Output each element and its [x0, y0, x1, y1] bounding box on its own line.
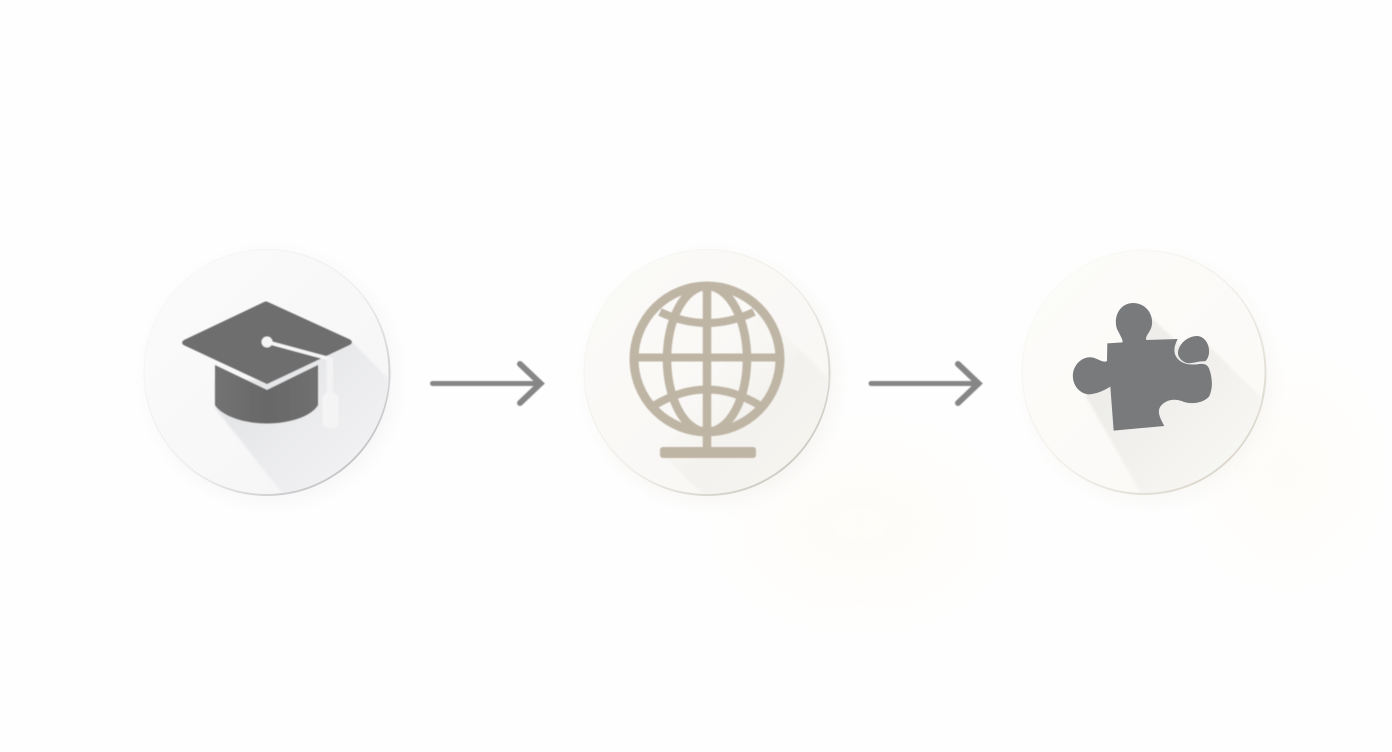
long shadow 3 [1086, 320, 1262, 492]
long shadow 1 [214, 343, 389, 492]
tassel string [326, 358, 333, 394]
puzzle body [1073, 303, 1212, 431]
icon: globe [634, 286, 780, 458]
cap button [262, 336, 272, 348]
puzzle tab [1178, 336, 1209, 363]
meridians [667, 286, 747, 448]
arrow 1 [432, 364, 540, 403]
tassel cord [267, 342, 330, 359]
infographic canvas [144, 249, 1266, 497]
step 2: globe badge [584, 249, 830, 496]
parallels [634, 312, 780, 405]
step 1: graduation cap badge [144, 249, 390, 496]
globe outline [634, 286, 780, 432]
globe stand [660, 447, 756, 458]
step 3: puzzle badge [1022, 250, 1266, 495]
long shadow 2 [720, 378, 829, 494]
badge disc 2 [584, 249, 834, 500]
tassel [322, 392, 338, 428]
icon: puzzle piece [1073, 303, 1212, 431]
icon: graduation cap [182, 302, 352, 428]
cap body [215, 365, 318, 424]
badge disc 1 [144, 249, 393, 499]
arrow 2 [871, 364, 978, 403]
badge disc 3 [1022, 250, 1270, 499]
mortarboard [182, 302, 352, 384]
